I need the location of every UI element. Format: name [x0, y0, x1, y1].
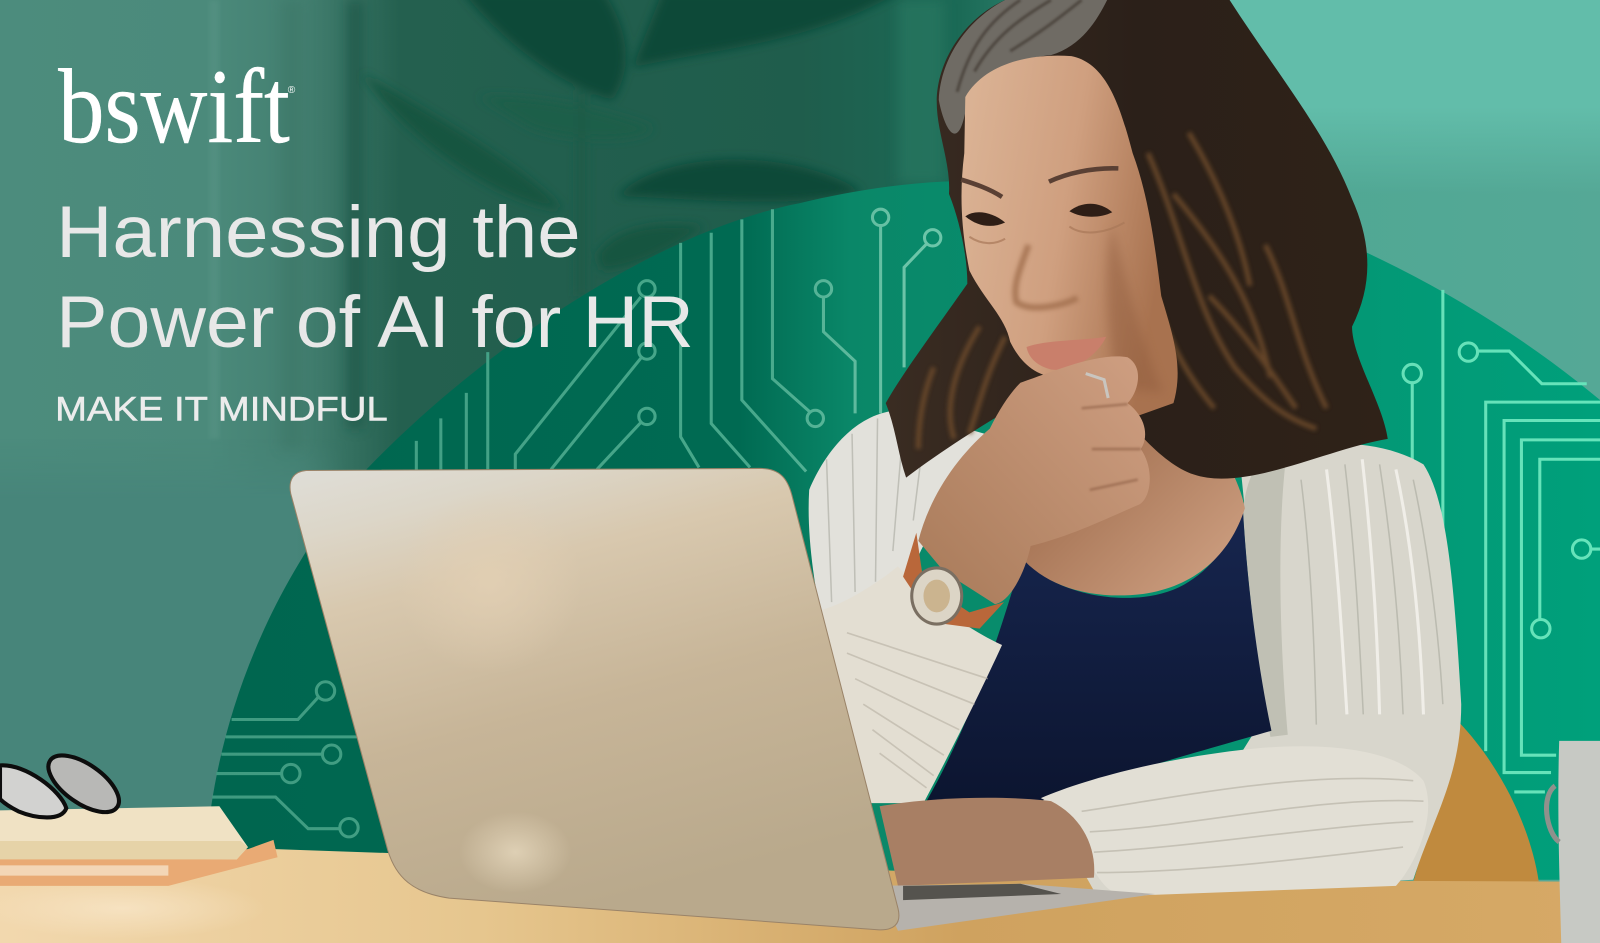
title [56, 190, 694, 363]
knit cardigan edge [1243, 444, 1288, 737]
grey hair highlights [939, 0, 1107, 134]
subtitle: MAKE IT MINDFUL [55, 390, 388, 428]
ring [1086, 374, 1108, 398]
circuit board traces [212, 209, 1600, 837]
table top [0, 849, 1600, 943]
eyebrows [961, 168, 1118, 197]
title: Harnessing the [56, 190, 581, 273]
cheek shadow [1107, 225, 1163, 393]
table reflection [0, 878, 265, 939]
cardigan ribs [1327, 459, 1423, 714]
title: Power of AI for HR [56, 280, 694, 363]
plant leaves [365, 0, 891, 272]
decorative green dome [209, 181, 1600, 880]
brown hair strands [918, 133, 1327, 449]
neck and chest [1020, 367, 1245, 595]
bswift logo: ® [288, 85, 296, 96]
light patches on lid [398, 490, 582, 674]
coffee mug [1547, 741, 1600, 943]
eyeglasses [0, 744, 128, 823]
laptop lid [290, 468, 899, 930]
watch [903, 533, 1004, 629]
typing hand [880, 798, 1094, 886]
navy top [927, 508, 1271, 801]
lips [1027, 337, 1106, 370]
bswift logo: bswift [58, 47, 290, 165]
typing forearm sleeve [1041, 746, 1428, 896]
nose [1015, 245, 1078, 307]
face [962, 56, 1178, 429]
laptop [290, 468, 1155, 931]
eyes [965, 204, 1124, 243]
hair [886, 0, 1388, 479]
laptop base [878, 884, 1155, 931]
cardigan: raised sleeve [806, 566, 1002, 803]
hand at chin [918, 356, 1150, 604]
woman [806, 0, 1461, 896]
chair back [1413, 723, 1539, 882]
stacked books [0, 806, 278, 886]
cardigan: left upper arm [809, 410, 1005, 663]
knuckle lines [1082, 404, 1141, 490]
cardigan: body and right arm [1041, 443, 1461, 896]
